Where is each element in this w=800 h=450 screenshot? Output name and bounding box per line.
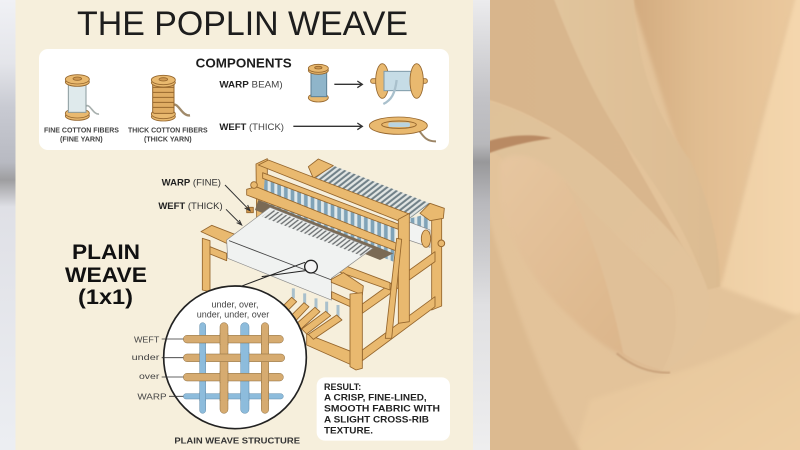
panel: result: TEXTURE. xyxy=(324,426,373,436)
blue warp threads xyxy=(200,323,249,413)
leader lines xyxy=(162,339,183,396)
title: THE POPLIN WEAVE xyxy=(77,5,408,43)
cloth fell line xyxy=(229,241,332,280)
caption: under over xyxy=(197,300,269,320)
far right post xyxy=(432,211,442,310)
top castle beam xyxy=(258,160,409,222)
label: warp: WARP xyxy=(137,391,167,401)
back warp threads xyxy=(313,165,430,218)
tan weft threads xyxy=(183,335,285,381)
fabric: top-left drape xyxy=(490,0,678,239)
callout ring xyxy=(305,260,317,273)
arrow: warp spool to beam xyxy=(334,81,362,88)
heddle warp with blue stripes xyxy=(262,177,397,262)
reed teeth xyxy=(262,209,372,256)
label: weft thick: WEFT (THICK) xyxy=(219,122,284,132)
front right leg xyxy=(350,293,362,370)
callout lines xyxy=(238,262,306,287)
label: fine cotton fibers: FINE COTTON FIBERS xyxy=(44,127,119,134)
arrow: warp xyxy=(225,185,250,211)
front right post xyxy=(398,213,409,323)
heading: plain weave: (1x1) xyxy=(78,286,133,309)
fabric: swirl outer fold xyxy=(638,198,699,277)
caption: under over: under, under, over xyxy=(197,310,269,320)
panel: result xyxy=(317,377,450,441)
fabric: lower left sweep xyxy=(490,232,579,450)
treadle strings xyxy=(293,288,338,317)
woven cloth xyxy=(227,207,373,300)
blue weft thread xyxy=(183,394,283,399)
heading: plain weave: WEAVE xyxy=(65,264,147,287)
fabric: swirl pocket xyxy=(561,263,636,362)
front right breast beam xyxy=(331,273,363,295)
components heading: COMPONENTS xyxy=(196,55,292,70)
loom illustration xyxy=(158,159,445,370)
fabric: dark inner crease xyxy=(487,135,552,154)
label: thick cotton fibers xyxy=(128,127,208,143)
label: thick cotton fibers: (THICK YARN) xyxy=(144,136,192,143)
icon: fine yarn spool xyxy=(65,75,99,120)
arrow: weft xyxy=(226,209,242,225)
left background strip xyxy=(0,0,16,450)
lower heddle beam xyxy=(247,187,398,252)
weave magnifier xyxy=(132,286,450,445)
fabric: right light area xyxy=(720,0,800,320)
dark reed shadow xyxy=(255,200,393,260)
lower rails xyxy=(362,252,435,313)
front left leg xyxy=(202,238,210,292)
fabric: bottom sweep xyxy=(680,374,800,450)
label: warp fine: WARP (FINE) xyxy=(162,177,221,187)
icon: thick yarn spool xyxy=(151,75,190,121)
label: weft: WEFT xyxy=(134,334,160,344)
panel: result: A SLIGHT CROSS-RIB xyxy=(324,415,430,425)
heading: plain weave: PLAIN xyxy=(72,241,140,264)
right background strip xyxy=(473,0,491,450)
fabric: central fold band xyxy=(552,0,720,290)
back beam left block xyxy=(308,159,333,178)
poster panel xyxy=(16,0,473,450)
breast beam left xyxy=(201,225,245,247)
panel: result: A CRISP, FINE-LINED, xyxy=(324,393,427,403)
rear warp below xyxy=(410,213,430,230)
panel: components xyxy=(39,49,449,150)
label: weft thick: WEFT (THICK) xyxy=(158,201,223,211)
heading: plain weave xyxy=(65,241,147,309)
caption: plain weave structure: PLAIN WEAVE STRUCTURE xyxy=(174,435,300,445)
caption: under over: under, over, xyxy=(212,300,258,310)
label: fine cotton fibers: (FINE YARN) xyxy=(60,136,103,143)
lower cloth beam xyxy=(338,265,390,290)
fabric: inner pleat xyxy=(608,259,671,368)
brace xyxy=(385,238,402,338)
icon: weft shuttle xyxy=(369,117,436,141)
treadles xyxy=(282,297,342,339)
back beam right block xyxy=(420,203,444,221)
panel: result: SMOOTH FABRIC WITH xyxy=(324,404,440,414)
fabric: pleat edge shadow xyxy=(617,353,670,373)
fabric photo xyxy=(483,0,800,450)
blue crossings over weft xyxy=(200,352,249,401)
side block xyxy=(247,207,253,213)
label: under: under xyxy=(132,352,159,362)
tan crossings over weft xyxy=(220,333,269,401)
cloth roller xyxy=(408,222,430,247)
label: warp beam: WARP BEAM) xyxy=(219,79,283,89)
left back post xyxy=(256,159,267,220)
label: fine cotton fibers xyxy=(44,127,119,143)
tan warp threads xyxy=(220,323,269,413)
label: thick cotton fibers: THICK COTTON FIBERS xyxy=(128,127,208,134)
icon: warp beam xyxy=(371,64,427,104)
fabric: shadowed fold panel xyxy=(634,0,707,198)
arrow: weft to shuttle xyxy=(293,123,362,130)
icon: warp spool xyxy=(308,64,328,102)
panel: result: RESULT: xyxy=(324,382,361,392)
label: over: over xyxy=(139,371,159,381)
